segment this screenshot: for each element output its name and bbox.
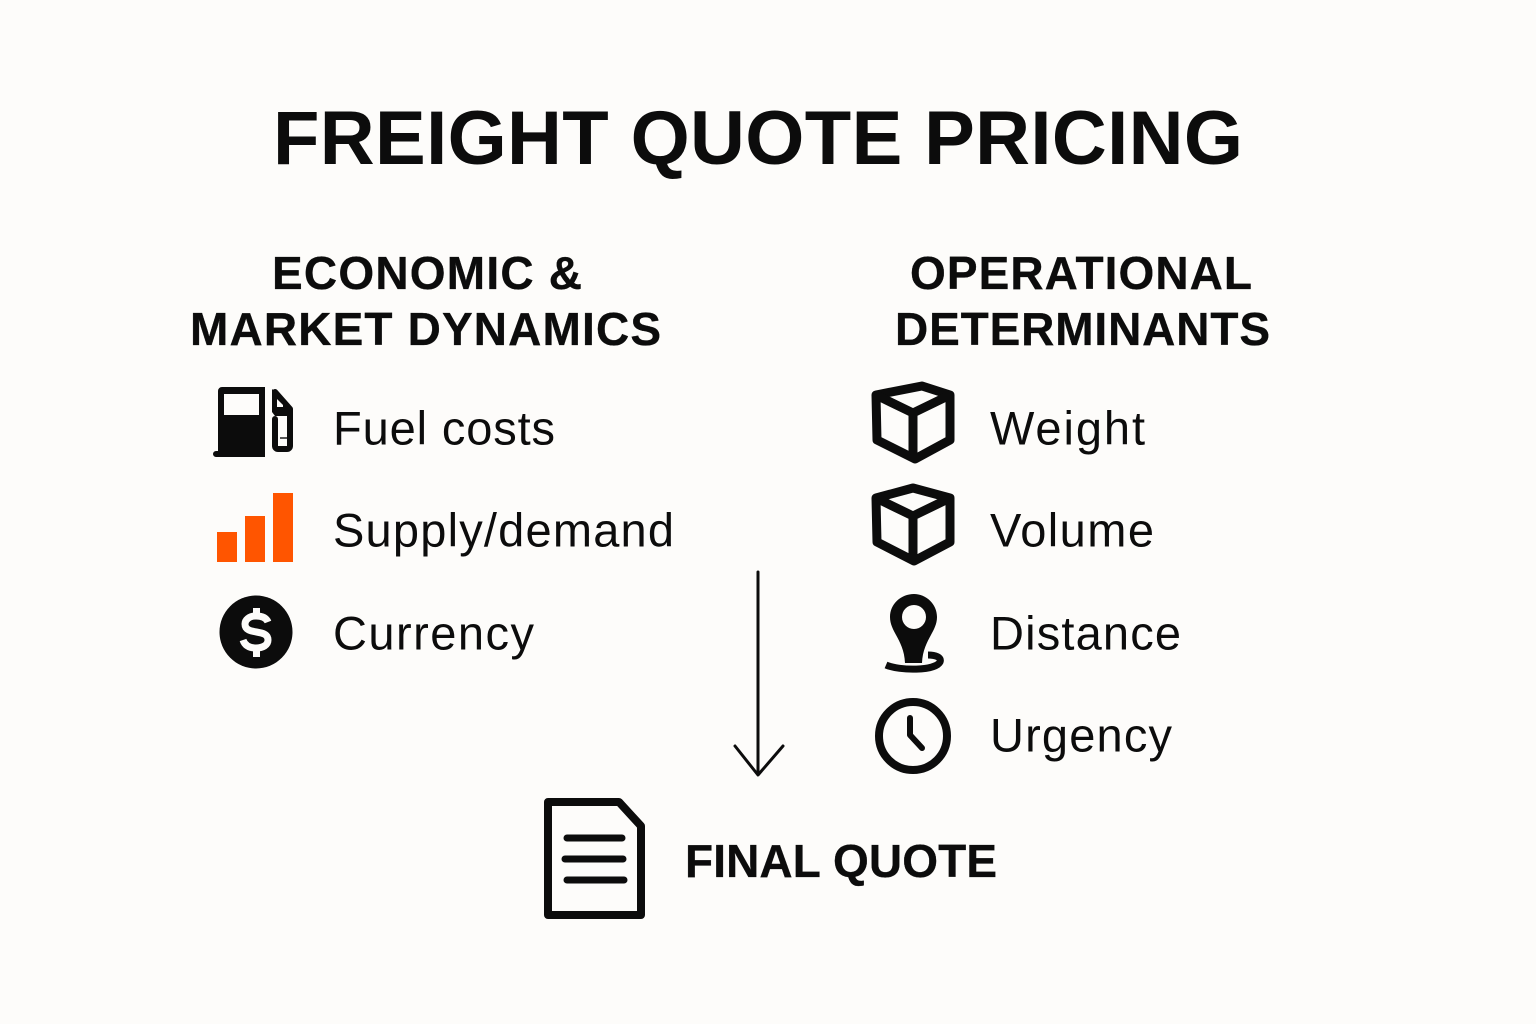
item: currency: Currency	[333, 606, 534, 660]
heading: operational determinants: DETERMINANTS	[895, 303, 1270, 355]
item: distance: Distance	[990, 606, 1181, 660]
item: supply and demand: Supply/demand	[333, 504, 674, 556]
icon: supply and demand bars	[217, 493, 293, 562]
panel: final quote	[548, 802, 997, 915]
item: weight: Weight	[990, 402, 1145, 454]
icon: urgency clock	[879, 702, 947, 770]
title: FREIGHT QUOTE PRICING	[273, 96, 1243, 181]
heading: operational determinants	[895, 247, 1270, 355]
heading: economic and market dynamics	[190, 247, 661, 355]
heading: economic and market dynamics: ECONOMIC &	[272, 247, 582, 299]
arrow: flow to final quote	[735, 572, 783, 775]
panel: economic and market dynamics	[190, 247, 674, 668]
icon: fuel pump	[213, 387, 293, 457]
item: volume: Volume	[990, 504, 1154, 556]
icon: currency	[220, 596, 292, 668]
item: urgency: Urgency	[990, 708, 1172, 762]
icon: volume cube	[876, 488, 950, 561]
icon: weight cube	[876, 386, 950, 459]
label: final quote: FINAL QUOTE	[685, 835, 997, 887]
item: fuel costs: Fuel costs	[333, 402, 555, 454]
heading: economic and market dynamics: MARKET DYNAMICS	[190, 303, 661, 355]
icon: document	[548, 802, 641, 915]
panel: operational determinants	[876, 247, 1270, 770]
heading: operational determinants: OPERATIONAL	[910, 247, 1252, 299]
icon: distance pin	[886, 594, 940, 669]
